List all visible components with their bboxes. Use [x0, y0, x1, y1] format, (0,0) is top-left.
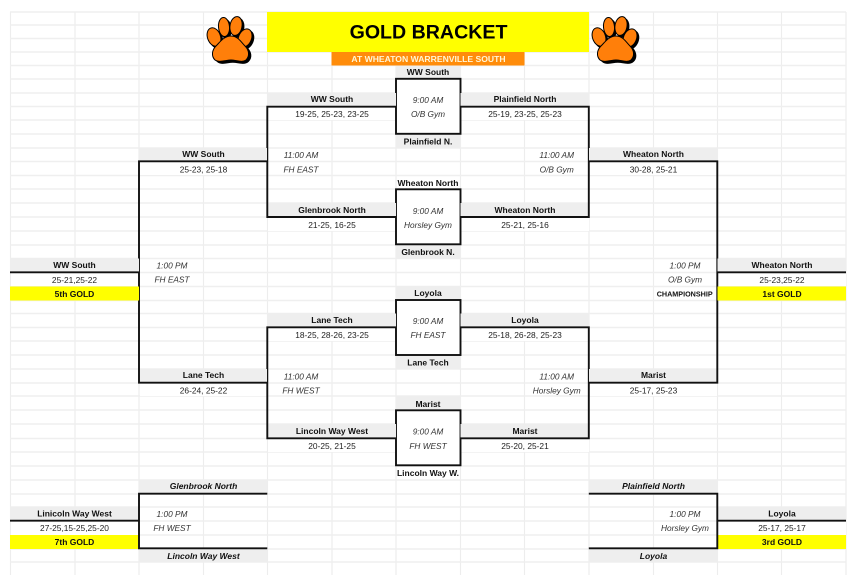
panel: 7th place match: FH WEST — [153, 523, 192, 533]
match: Wheaton North vs Glenbrook N.: 9:00 AM — [413, 206, 443, 216]
match: WW South vs Plainfield N.: WW South — [407, 67, 449, 77]
panel: right quarterfinals: 25-18, 26-28, 25-23 — [488, 330, 562, 340]
result: 5th gold: 25-21,25-22 — [52, 275, 97, 285]
match: WW South vs Plainfield N.: Plainfield N. — [404, 136, 452, 146]
panel: left quarterfinals: WW South — [311, 94, 353, 104]
panel: left semifinal: 26-24, 25-22 — [180, 386, 228, 396]
panel: left quarterfinals: 21-25, 16-25 — [308, 220, 356, 230]
panel: 3rd place match: 1:00 PM — [670, 509, 701, 519]
panel: opening round centre matches — [396, 66, 460, 478]
panel: left quarterfinals: 20-25, 21-25 — [308, 441, 356, 451]
panel: right quarterfinals: Plainfield North — [494, 94, 556, 104]
panel: right quarterfinals: 25-20, 25-21 — [501, 441, 549, 451]
title banner: GOLD BRACKET — [350, 22, 507, 44]
panel: right quarterfinals — [460, 93, 589, 451]
result: 5th gold: 5th GOLD — [55, 289, 94, 299]
panel: right quarterfinals: Horsley Gym — [533, 386, 581, 396]
panel: left quarterfinals — [267, 93, 396, 451]
panel: 7th place match: Glenbrook North — [170, 481, 237, 491]
panel: left quarterfinals: Glenbrook North — [298, 205, 366, 215]
panel: right quarterfinals: 25-19, 23-25, 25-23 — [488, 109, 562, 119]
match: Wheaton North vs Glenbrook N.: Glenbrook N. — [401, 247, 455, 257]
panel: 7th place match: 27-25,15-25,25-20 — [40, 523, 109, 533]
panel: 3rd place match: Plainfield North — [622, 481, 685, 491]
panel: right semifinal — [589, 148, 718, 396]
panel: left quarterfinals: FH EAST — [283, 164, 319, 174]
match: Wheaton North vs Glenbrook N. — [396, 178, 460, 258]
panel: 3rd place match: Loyola — [640, 551, 667, 561]
match: Loyola vs Lane Tech: Lane Tech — [407, 358, 449, 368]
panel: right semifinal: CHAMPIONSHIP — [657, 290, 713, 299]
panel: 7th place match: 1:00 PM — [157, 509, 188, 519]
panel: left semifinal: 1:00 PM — [157, 261, 188, 271]
result: 5th gold — [10, 258, 139, 300]
match: Marist vs Lincoln Way W.: 9:00 AM — [413, 426, 443, 436]
panel: right quarterfinals: Loyola — [511, 315, 539, 325]
panel: right quarterfinals: 11:00 AM — [539, 372, 574, 382]
match: WW South vs Plainfield N.: 9:00 AM — [413, 95, 443, 105]
match: WW South vs Plainfield N.: O/B Gym — [411, 109, 445, 119]
panel: left semifinal: WW South — [182, 149, 225, 159]
match: Loyola vs Lane Tech: 9:00 AM — [413, 316, 443, 326]
panel: 7th place match: Linicoln Way West — [37, 508, 112, 518]
panel: right quarterfinals: O/B Gym — [540, 164, 574, 174]
title banner — [267, 12, 589, 52]
result: 1st gold — [717, 258, 846, 300]
panel: right quarterfinals: 25-21, 25-16 — [501, 220, 549, 230]
panel: left semifinal: Lane Tech — [183, 370, 224, 380]
panel: left quarterfinals: 11:00 AM — [284, 372, 318, 382]
panel: 3rd place match: 3rd GOLD — [762, 537, 802, 547]
match: Marist vs Lincoln Way W. — [396, 396, 460, 478]
icon: left tiger paw — [205, 16, 257, 64]
icon: right tiger paw — [590, 16, 642, 64]
panel: right semifinal: 30-28, 25-21 — [630, 164, 678, 174]
subtitle banner — [332, 52, 524, 66]
panel: 3rd place match: 25-17, 25-17 — [758, 523, 806, 533]
match: Marist vs Lincoln Way W.: FH WEST — [409, 441, 448, 451]
panel: right quarterfinals: Marist — [512, 426, 538, 436]
panel: right semifinal: Wheaton North — [623, 149, 684, 159]
panel: left quarterfinals: 18-25, 28-26, 23-25 — [295, 330, 369, 340]
panel: 3rd place match: Horsley Gym — [661, 523, 709, 533]
panel: right semifinal: Marist — [641, 370, 666, 380]
match: Wheaton North vs Glenbrook N.: Horsley Gym — [404, 220, 452, 230]
subtitle banner: AT WHEATON WARRENVILLE SOUTH — [351, 54, 506, 64]
panel: 7th place match — [10, 480, 267, 562]
panel: left quarterfinals: 19-25, 25-23, 23-25 — [295, 109, 369, 119]
panel: left quarterfinals: FH WEST — [282, 386, 321, 396]
panel: left quarterfinals: Lane Tech — [311, 315, 353, 325]
match: Marist vs Lincoln Way W.: Marist — [415, 399, 441, 409]
panel: 7th place match: 7th GOLD — [55, 537, 94, 547]
panel: 3rd place match — [589, 480, 846, 562]
panel: right quarterfinals: Wheaton North — [495, 205, 555, 215]
match: Loyola vs Lane Tech: FH EAST — [410, 330, 446, 340]
panel: right semifinal: O/B Gym — [668, 275, 702, 285]
match: Loyola vs Lane Tech: Loyola — [414, 288, 442, 298]
panel: 7th place match: Lincoln Way West — [167, 551, 241, 561]
panel: right semifinal: 1:00 PM — [670, 261, 701, 271]
result: 1st gold: 1st GOLD — [762, 289, 802, 299]
result: 1st gold: 25-23,25-22 — [759, 275, 805, 285]
panel: right quarterfinals: 11:00 AM — [539, 150, 574, 160]
panel: left semifinal: 25-23, 25-18 — [180, 164, 228, 174]
panel: left quarterfinals: Lincoln Way West — [296, 426, 368, 436]
panel: left semifinal — [139, 148, 267, 396]
panel: right semifinal: 25-17, 25-23 — [630, 386, 678, 396]
panel: left semifinal: FH EAST — [154, 275, 190, 285]
panel: 3rd place match: Loyola — [768, 508, 796, 518]
result: 5th gold: WW South — [53, 260, 96, 270]
match: WW South vs Plainfield N. — [396, 66, 460, 148]
match: Marist vs Lincoln Way W.: Lincoln Way W. — [397, 468, 459, 478]
match: Loyola vs Lane Tech — [396, 286, 460, 369]
match: Wheaton North vs Glenbrook N.: Wheaton North — [398, 178, 458, 188]
panel: left quarterfinals: 11:00 AM — [284, 150, 318, 160]
result: 1st gold: Wheaton North — [752, 260, 812, 270]
